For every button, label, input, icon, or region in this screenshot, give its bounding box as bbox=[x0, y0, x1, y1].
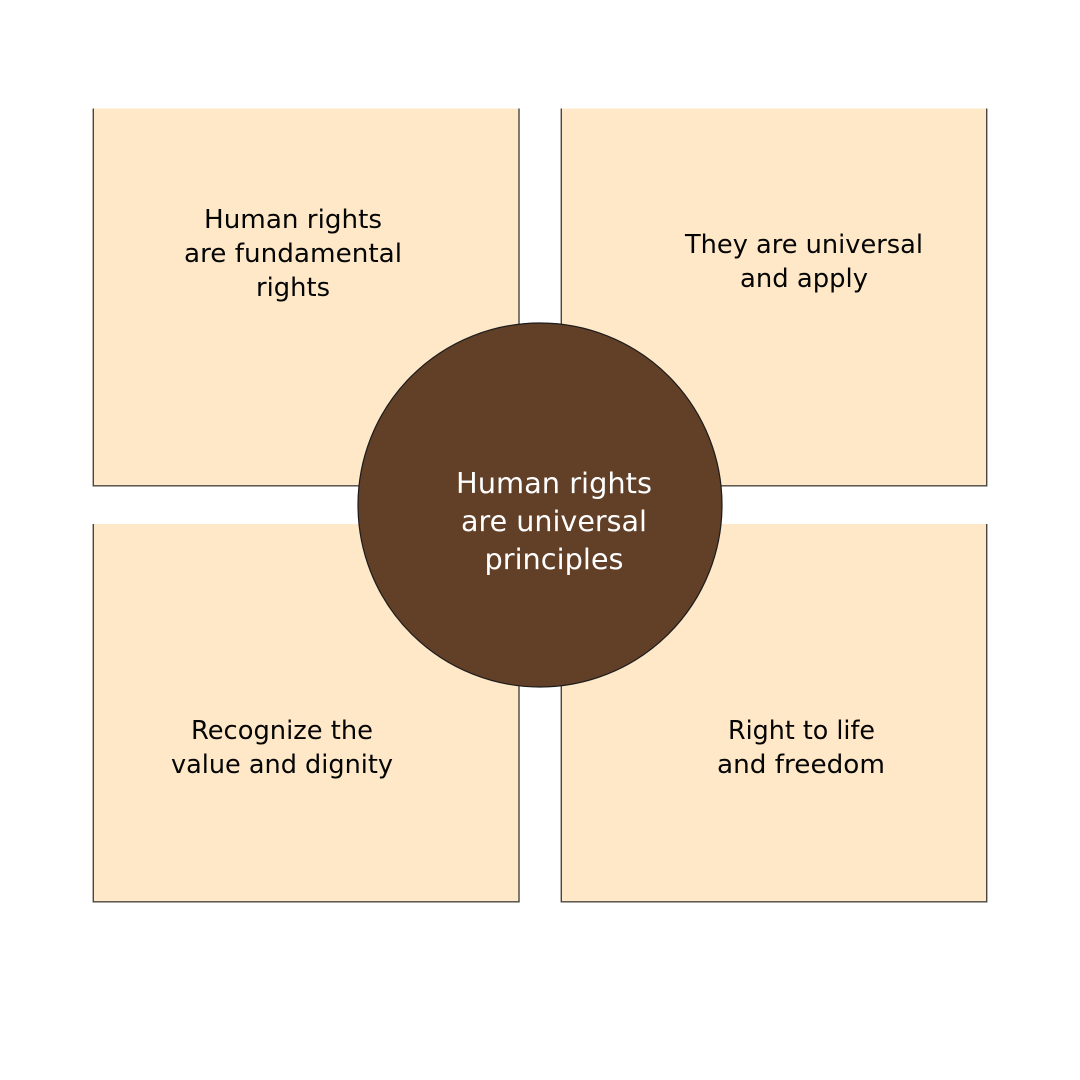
text: human rights are fundamental rights: rights bbox=[256, 273, 330, 303]
text: they are universal and apply: They are universal bbox=[684, 230, 923, 260]
panel: top right bbox=[561, 108, 987, 486]
text: recognize the value and dignity: value and dignity bbox=[171, 750, 393, 780]
text: they are universal and apply: and apply bbox=[740, 264, 868, 294]
text: human rights are universal principles: are universal bbox=[461, 505, 647, 538]
text: human rights are universal principles: Human rights bbox=[456, 467, 652, 500]
text: human rights are fundamental rights: Human rights bbox=[204, 205, 382, 235]
center circle bbox=[358, 323, 722, 687]
text: right to life and freedom bbox=[717, 716, 885, 780]
text: right to life and freedom: and freedom bbox=[717, 750, 885, 780]
panel: top left bbox=[93, 108, 519, 486]
text: recognize the value and dignity: Recognize the bbox=[191, 716, 373, 746]
text: recognize the value and dignity bbox=[171, 716, 393, 780]
text: they are universal and apply bbox=[684, 230, 923, 294]
text: human rights are fundamental rights: are fundamental bbox=[184, 239, 402, 269]
text: right to life and freedom: Right to life bbox=[728, 716, 875, 746]
text: human rights are universal principles bbox=[456, 467, 652, 576]
panel: bottom left bbox=[93, 524, 519, 902]
text: human rights are universal principles: principles bbox=[484, 543, 624, 576]
panel: bottom right bbox=[561, 524, 987, 902]
text: human rights are fundamental rights bbox=[184, 205, 402, 303]
